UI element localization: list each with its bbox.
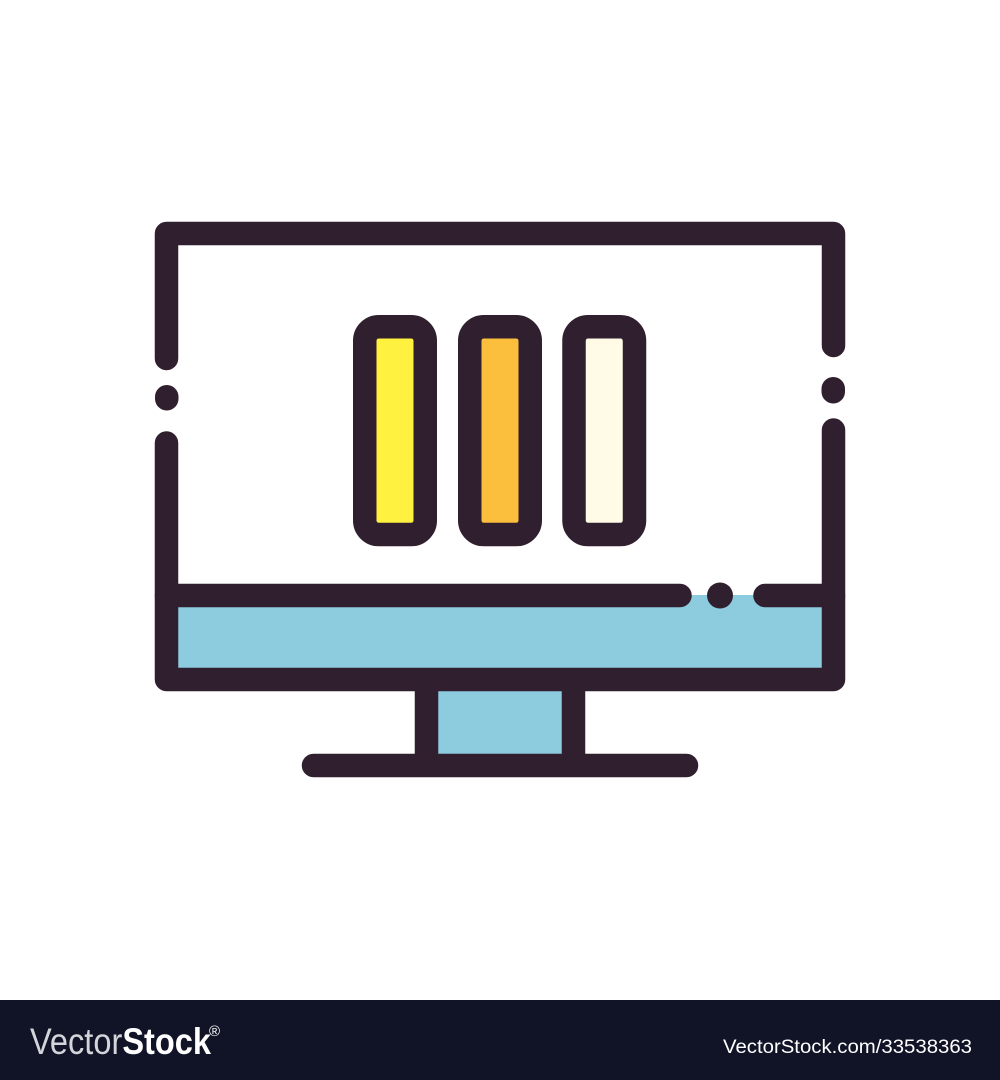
cream bar	[574, 327, 634, 534]
footer image id: VectorStock.com/33538363	[723, 1037, 972, 1058]
frame gap dots	[155, 377, 845, 608]
icon: computer monitor	[155, 234, 845, 766]
registered mark: ®	[209, 1023, 220, 1040]
orange bar	[470, 327, 530, 534]
monitor chin fill	[172, 595, 828, 674]
monitor frame outline	[166, 234, 834, 766]
footer logo: VectorStock	[30, 1021, 211, 1062]
monitor stand fill	[432, 685, 568, 760]
yellow bar	[365, 327, 425, 534]
footer bar	[0, 1000, 1000, 1080]
